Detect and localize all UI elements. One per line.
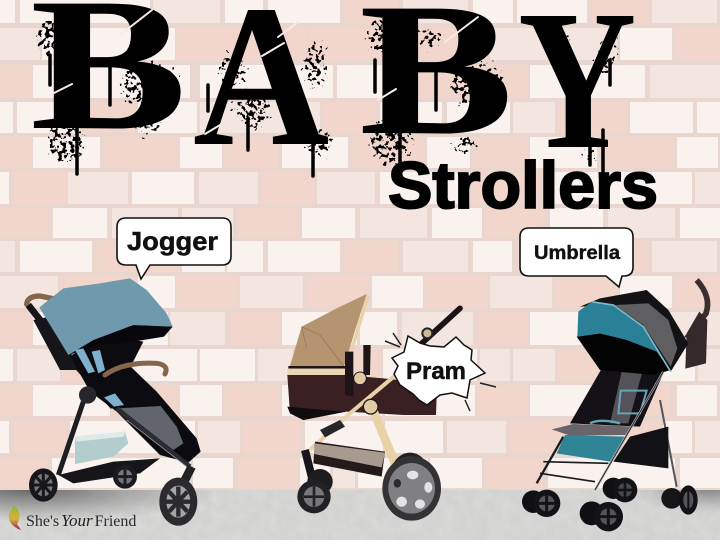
title: BABY bbox=[30, 0, 636, 191]
pram label starburst: Pram bbox=[406, 358, 466, 385]
jogger stroller bbox=[27, 278, 201, 526]
umbrella wheels bbox=[522, 478, 698, 531]
jogger label bubble bbox=[117, 218, 231, 279]
umbrella label bubble bbox=[520, 228, 633, 287]
jogger wheels bbox=[29, 465, 197, 526]
umbrella stroller bbox=[522, 280, 708, 531]
pram wheels bbox=[297, 453, 441, 521]
logo leaf icon bbox=[9, 505, 21, 530]
pram stroller bbox=[287, 294, 460, 521]
logo wordmark: She'sYourFriend bbox=[26, 511, 136, 530]
logo: She's Your Friend bbox=[9, 505, 136, 530]
umbrella label bubble: Umbrella bbox=[534, 243, 620, 264]
light slashes bbox=[50, 10, 478, 134]
pram label starburst bbox=[385, 333, 496, 411]
paint drips bbox=[50, 55, 610, 176]
subtitle: Strollers: Strollers bbox=[388, 148, 658, 222]
paint splatter behind title bbox=[32, 11, 619, 168]
jogger label bubble: Jogger bbox=[127, 226, 218, 256]
concrete ground bbox=[0, 490, 720, 540]
